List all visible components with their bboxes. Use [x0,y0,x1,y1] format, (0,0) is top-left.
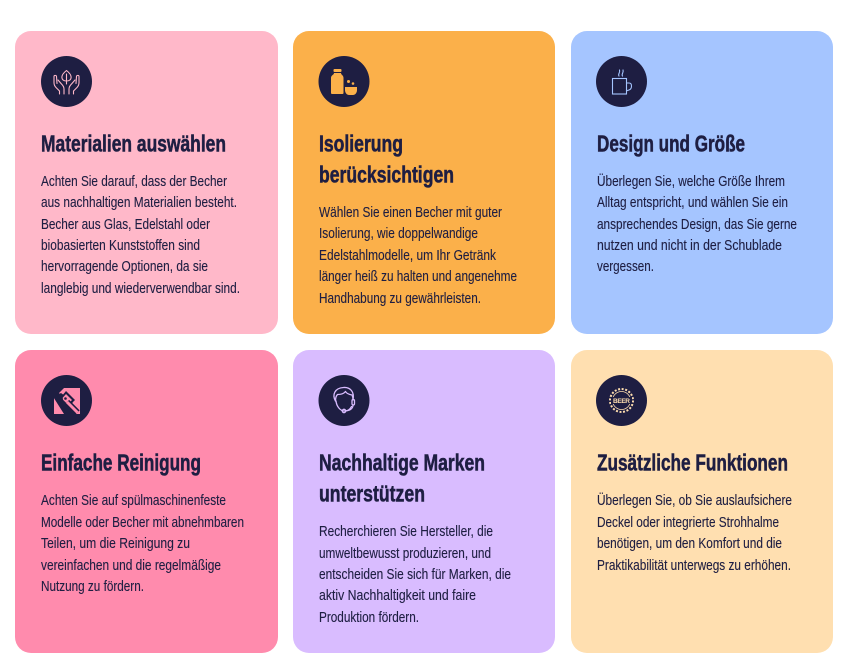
text block: Becher aus Glas, Edelstahl oder [41,217,210,233]
text block [41,493,244,595]
panel: Nachhaltige Marken unterstützen [293,350,555,653]
text block: Modelle oder Becher mit abnehmbaren [41,515,244,531]
text block: Isolierung, wie doppelwandige [319,226,478,242]
text block [597,491,792,574]
heading: Design und Größe [597,130,745,156]
text block [597,172,797,275]
text block: Recherchieren Sie Hersteller, die [319,524,493,540]
text block: Nutzung zu fördern. [41,579,144,595]
text block: langlebig und wiederverwendbar sind. [41,281,240,297]
heading: Zusätzliche Funktionen [597,450,788,476]
heading: unterstützen [319,480,425,506]
panel: Zusätzliche Funktionen [571,350,833,653]
text block: benötigen, um den Komfort und die [597,536,782,552]
text block: Alltag entspricht, und wählen Sie ein [597,195,788,211]
text block: ansprechendes Design, das Sie gerne [597,217,797,233]
icon: hands holding leaf [41,56,92,107]
text block: Achten Sie auf spülmaschinenfeste [41,493,226,509]
text block: Produktion fördern. [319,610,419,626]
text block: aktiv Nachhaltigkeit und faire [319,588,476,604]
text block: Achten Sie darauf, dass der Becher [41,174,227,190]
text block: vereinfachen und die regelmäßige [41,558,221,574]
heading [319,450,485,506]
text block: Überlegen Sie, ob Sie auslaufsichere [597,491,792,509]
text block [319,205,517,307]
panel: Design und Größe [571,31,833,334]
text block: Teilen, um die Reinigung zu [41,536,190,552]
heading: Einfache Reinigung [41,450,201,476]
icon: beer bottle cap: BEER [613,398,630,405]
heading: Materialien auswählen [41,130,226,156]
text block: Deckel oder integrierte Strohhalme [597,515,779,531]
text block: länger heiß zu halten und angenehme [319,269,517,285]
heading [319,130,454,188]
text block [41,174,240,297]
icon: bottle and bowl [318,56,370,107]
heading: Isolierung [319,130,403,156]
heading: berücksichtigen [319,162,454,188]
text block: vergessen. [597,259,654,275]
panel: Einfache Reinigung [15,350,278,653]
icon: beer bottle cap [596,375,647,426]
text block: entscheiden Sie sich für Marken, die [319,567,511,583]
text block [319,524,511,626]
panel: Isolierung berücksichtigen [293,31,555,334]
text block: nutzen und nicht in der Schublade [597,238,782,254]
text block: biobasierten Kunststoffen sind [41,238,200,254]
text block: Wählen Sie einen Becher mit guter [319,205,502,221]
icon: steaming mug [596,56,647,107]
icon: cleaning brush [41,375,92,426]
text block: Edelstahlmodelle, um Ihr Getränk [319,248,497,264]
heading: Nachhaltige Marken [319,450,485,476]
text block: aus nachhaltigen Materialien besteht. [41,195,237,211]
text block: umweltbewusst produzieren, und [319,546,491,562]
text block: Überlegen Sie, welche Größe Ihrem [597,172,785,190]
icon: headset person [318,375,370,426]
text block: hervorragende Optionen, da sie [41,259,208,275]
text block: Praktikabilität unterwegs zu erhöhen. [597,558,791,574]
panel: Materialien auswählen [15,31,278,334]
text block: Handhabung zu gewährleisten. [319,291,481,307]
